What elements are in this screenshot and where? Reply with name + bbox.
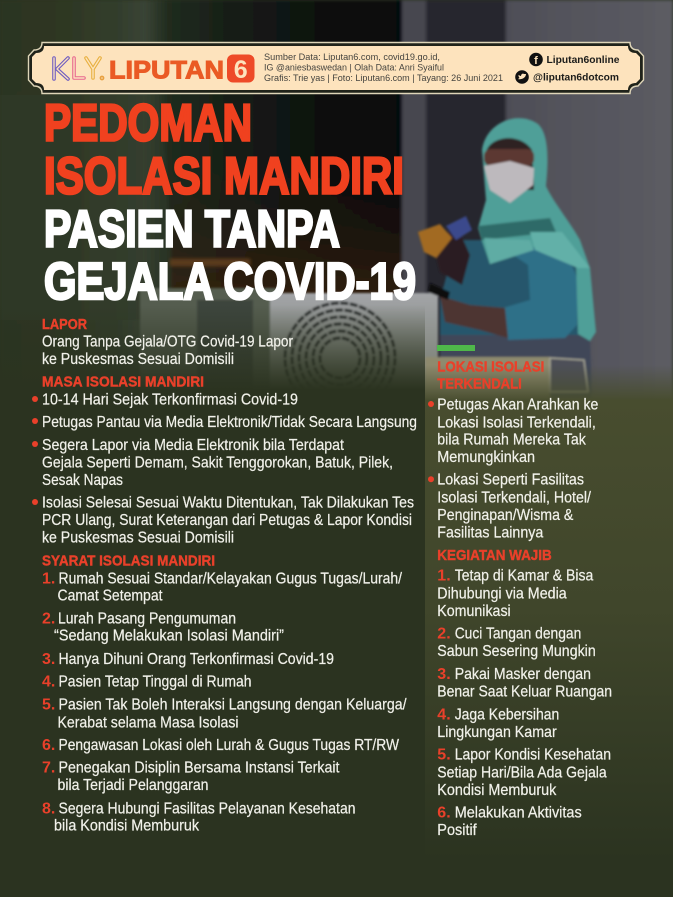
- panel: lokasi isolasi terkendali: [428, 345, 598, 541]
- panel: kegiatan wajib: 3.: [437, 666, 451, 683]
- panel: syarat isolasi mandiri: Pengawasan Lokasi oleh Lurah & Gugus Tugas RT/RW: [58, 737, 400, 754]
- panel: lokasi isolasi terkendali: Lokasi Seperti Fasilitas: [437, 472, 584, 489]
- panel: kegiatan wajib: 5.: [437, 747, 451, 764]
- panel: kegiatan wajib: Jaga Kebersihan: [455, 706, 559, 723]
- panel: syarat isolasi mandiri: 6.: [42, 737, 55, 754]
- panel: syarat isolasi mandiri: bila Terjadi Pelanggaran: [58, 777, 208, 794]
- panel: kegiatan wajib: Sabun Sesering Mungkin: [437, 643, 596, 660]
- panel: lokasi isolasi terkendali: Lokasi Isolasi Terkendali,: [437, 414, 596, 431]
- panel: syarat isolasi mandiri: Kerabat selama Masa Isolasi: [58, 714, 238, 731]
- panel: syarat isolasi mandiri: Penegakan Disiplin Bersama Instansi Terkait: [58, 760, 340, 777]
- panel: kegiatan wajib: Lingkungan Kamar: [437, 724, 557, 741]
- title: PEDOMAN: [44, 94, 252, 152]
- title: ISOLASI MANDIRI: [44, 148, 404, 206]
- panel: kegiatan wajib: Setiap Hari/Bila Ada Gejala: [437, 764, 607, 781]
- panel: syarat isolasi mandiri: 4.: [42, 674, 55, 691]
- panel: syarat isolasi mandiri: bila Kondisi Memburuk: [54, 818, 200, 835]
- panel: syarat isolasi mandiri: Camat Setempat: [58, 588, 163, 605]
- panel: syarat isolasi mandiri: Hanya Dihuni Orang Terkonfirmasi Covid-19: [58, 651, 334, 668]
- panel: lokasi isolasi terkendali: Petugas Akan Arahkan ke: [437, 396, 598, 413]
- title: [44, 94, 416, 311]
- panel: syarat isolasi mandiri: 8.: [42, 800, 55, 817]
- panel: syarat isolasi mandiri: Lurah Pasang Pengumuman: [58, 610, 236, 627]
- panel: lapor: ke Puskesmas Sesuai Domisili: [42, 351, 234, 368]
- panel: masa isolasi mandiri: Segera Lapor via Media Elektronik bila Terdapat: [42, 437, 344, 454]
- panel: lokasi isolasi terkendali: TERKENDALI: [437, 376, 522, 393]
- panel: kegiatan wajib: Komunikasi: [437, 603, 511, 620]
- woman figure: [418, 118, 596, 400]
- panel: lapor: [42, 316, 294, 368]
- title: GEJALA COVID-19: [44, 253, 416, 311]
- panel: kegiatan wajib: Cuci Tangan dengan: [455, 625, 581, 642]
- panel: masa isolasi mandiri: ke Puskesmas Sesuai Domisili: [42, 530, 234, 547]
- panel: syarat isolasi mandiri: 7.: [42, 760, 55, 777]
- panel: kegiatan wajib: Melakukan Aktivitas: [455, 804, 582, 821]
- social: facebook: f: [534, 55, 538, 67]
- panel: syarat isolasi mandiri: Pasien Tak Boleh Interaksi Langsung dengan Keluarga/: [58, 696, 407, 713]
- panel: kegiatan wajib: Lapor Kondisi Kesehatan: [455, 747, 611, 764]
- source credits: Sumber Data: Liputan6.com, covid19.go.id,: [264, 52, 440, 63]
- panel: kegiatan wajib: 4.: [437, 706, 451, 723]
- panel: syarat isolasi mandiri: SYARAT ISOLASI MANDIRI: [42, 552, 215, 569]
- panel: masa isolasi mandiri: PCR Ulang, Surat Keterangan dari Petugas & Lapor Kondisi: [42, 512, 412, 529]
- air conditioner unit: [140, 288, 438, 413]
- logo: Liputan6: 6: [234, 56, 248, 84]
- panel: kegiatan wajib: Positif: [437, 822, 477, 839]
- panel: masa isolasi mandiri: Petugas Pantau via Media Elektronik/Tidak Secara Langsung: [42, 414, 417, 431]
- panel: masa isolasi mandiri: 10-14 Hari Sejak Terkonfirmasi Covid-19: [42, 392, 298, 409]
- logo: Liputan6: [109, 54, 254, 84]
- panel: lokasi isolasi terkendali: Memungkinkan: [437, 449, 535, 466]
- panel: lapor: LAPOR: [42, 316, 87, 333]
- panel: masa isolasi mandiri: MASA ISOLASI MANDIRI: [42, 374, 204, 390]
- panel: syarat isolasi mandiri: “Sedang Melakukan Isolasi Mandiri”: [54, 628, 284, 645]
- panel: kegiatan wajib: [437, 547, 612, 839]
- panel: kegiatan wajib: Dihubungi via Media: [437, 586, 567, 603]
- panel: masa isolasi mandiri: Gejala Seperti Demam, Sakit Tenggorokan, Batuk, Pilek,: [42, 455, 393, 472]
- source credits: IG @aniesbaswedan | Olah Data: Anri Syaiful: [264, 62, 444, 74]
- header banner: [28, 42, 644, 94]
- logo: Liputan6: LIPUTAN: [109, 56, 224, 84]
- panel: kegiatan wajib: 2.: [437, 625, 451, 642]
- panel: lapor: Orang Tanpa Gejala/OTG Covid-19 Lapor: [42, 334, 294, 350]
- panel: kegiatan wajib: 1.: [437, 568, 451, 585]
- social: facebook: [529, 53, 620, 67]
- social: twitter: @liputan6dotcom: [533, 72, 619, 84]
- panel: kegiatan wajib: Tetap di Kamar & Bisa: [455, 568, 593, 585]
- panel: kegiatan wajib: Kondisi Memburuk: [437, 782, 557, 799]
- panel: kegiatan wajib: KEGIATAN WAJIB: [437, 547, 552, 564]
- logo: KLY: [54, 58, 104, 80]
- panel: syarat isolasi mandiri: 5.: [42, 696, 55, 713]
- panel: syarat isolasi mandiri: 1.: [42, 570, 55, 587]
- panel: lokasi isolasi terkendali: Fasilitas Lainnya: [437, 524, 543, 541]
- panel: kegiatan wajib: Benar Saat Keluar Ruangan: [437, 684, 612, 701]
- panel: masa isolasi mandiri: Isolasi Selesai Sesuai Waktu Ditentukan, Tak Dilakukan Tes: [42, 494, 414, 512]
- panel: masa isolasi mandiri: Sesak Napas: [42, 472, 123, 489]
- panel: syarat isolasi mandiri: 3.: [42, 651, 55, 668]
- panel: kegiatan wajib: 6.: [437, 804, 451, 821]
- panel: masa isolasi mandiri: [32, 374, 417, 547]
- panel: syarat isolasi mandiri: Pasien Tetap Tinggal di Rumah: [58, 674, 252, 691]
- panel: syarat isolasi mandiri: [42, 552, 407, 835]
- panel: lokasi isolasi terkendali: bila Rumah Mereka Tak: [437, 432, 587, 449]
- panel: syarat isolasi mandiri: Rumah Sesuai Standar/Kelayakan Gugus Tugas/Lurah/: [58, 570, 402, 587]
- title: PASIEN TANPA: [44, 200, 340, 258]
- panel: lokasi isolasi terkendali: Penginapan/Wisma &: [437, 507, 574, 524]
- panel: syarat isolasi mandiri: 2.: [42, 610, 55, 627]
- panel: syarat isolasi mandiri: Segera Hubungi Fasilitas Pelayanan Kesehatan: [58, 800, 356, 817]
- panel: lokasi isolasi terkendali: Isolasi Terkendali, Hotel/: [437, 490, 591, 507]
- source credits: Grafis: Trie yas | Foto: Liputan6.com | Tayang: 26 Juni 2021: [264, 73, 503, 84]
- source credits: [264, 52, 503, 84]
- panel: kegiatan wajib: Pakai Masker dengan: [455, 666, 591, 683]
- social: facebook: Liputan6online: [546, 54, 620, 66]
- panel: lokasi isolasi terkendali: LOKASI ISOLASI: [437, 358, 544, 375]
